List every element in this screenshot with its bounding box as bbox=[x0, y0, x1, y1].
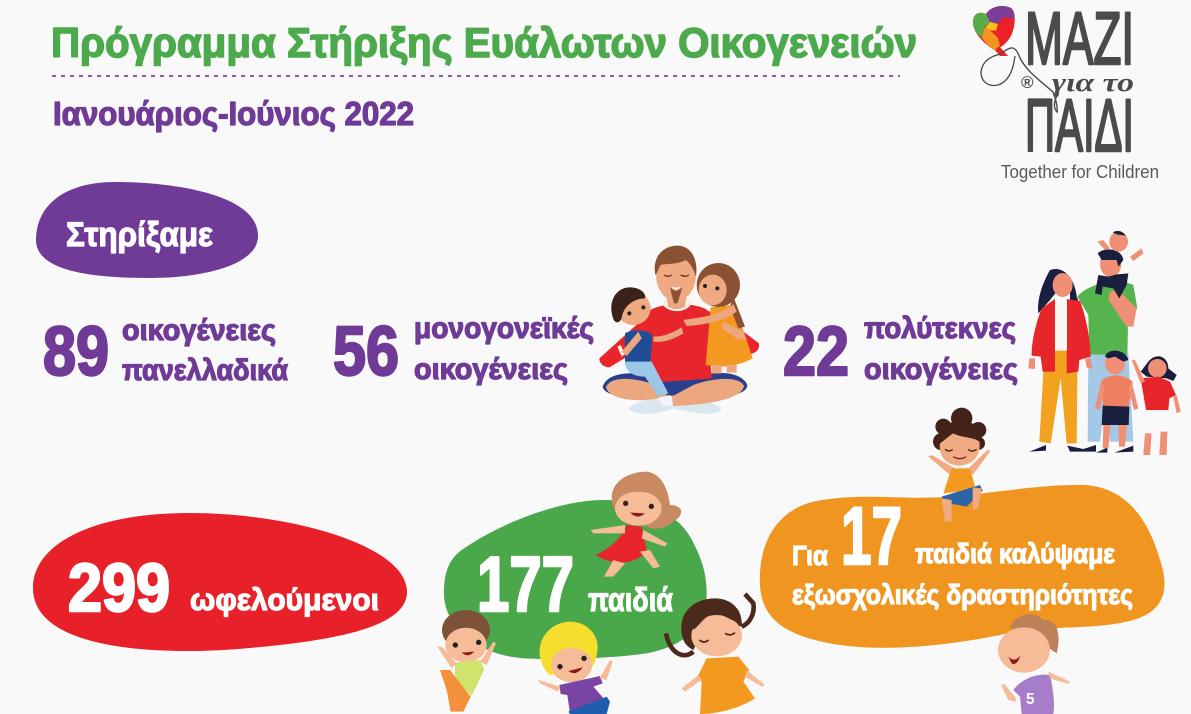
stat: 22 large families bbox=[783, 312, 1018, 390]
stat: 56 single-parent families: οικογένειες bbox=[414, 353, 568, 386]
panel: 17 children extracurricular activities: 17 bbox=[841, 491, 902, 582]
logo: ® bbox=[1021, 73, 1034, 92]
panel: 177 children bbox=[444, 500, 707, 659]
subtitle: period: Ιανουάριος-Ιούνιος 2022 bbox=[53, 95, 414, 132]
heading pill: Στηρίξαμε bbox=[36, 182, 258, 278]
icon: puzzle heart balloon bbox=[973, 6, 1058, 112]
panel: 299 beneficiaries bbox=[33, 513, 407, 651]
stat: 89 families: 89 bbox=[43, 312, 109, 390]
stat: 56 single-parent families: 56 bbox=[333, 312, 399, 390]
illustration: girl in red dress bbox=[591, 472, 681, 577]
panel: 17 children extracurricular activities bbox=[760, 485, 1165, 648]
panel: 17 children extracurricular activities: εξωσχολικές δραστηριότητες bbox=[792, 579, 1133, 610]
logo: για το bbox=[1052, 68, 1134, 97]
illustration: boy in green shirt bbox=[437, 610, 496, 712]
panel: 299 beneficiaries: 299 bbox=[68, 550, 170, 626]
illustration: blond boy in purple shirt bbox=[538, 622, 613, 714]
stat: 22 large families: 22 bbox=[783, 312, 849, 390]
stat: 89 families bbox=[43, 312, 288, 390]
panel: 177 children: παιδιά bbox=[588, 581, 673, 618]
panel: 299 beneficiaries: ωφελούμενοι bbox=[190, 582, 379, 617]
stat: 22 large families: οικογένειες bbox=[864, 353, 1018, 386]
illustration: father with two children bbox=[599, 246, 759, 414]
illustration: curly boy sitting on orange panel bbox=[928, 408, 991, 522]
illustration: running boy number 5 bbox=[998, 614, 1070, 714]
illustration: family with four members and baby bbox=[1028, 231, 1181, 455]
illustration: running boy number 5: 5 bbox=[1026, 691, 1035, 708]
stat: 56 single-parent families: μονογονεϊκές bbox=[414, 312, 594, 345]
panel: 17 children extracurricular activities: Για bbox=[792, 540, 828, 571]
stat: 89 families: πανελλαδικά bbox=[122, 354, 288, 387]
illustration: girl with braids in orange dress bbox=[666, 594, 765, 714]
title: Πρόγραμμα Στήριξης Ευάλωτων Οικογενειών bbox=[51, 19, 917, 66]
panel: 177 children: 177 bbox=[477, 540, 574, 628]
stat: 56 single-parent families bbox=[333, 312, 594, 390]
panel: 17 children extracurricular activities: παιδιά καλύψαμε bbox=[915, 538, 1115, 569]
stat: 22 large families: πολύτεκνες bbox=[864, 312, 1016, 345]
logo: Together for Children bbox=[1001, 162, 1159, 182]
heading pill: Στηρίξαμε: Στηρίξαμε bbox=[66, 216, 213, 254]
illustration: jumping children bbox=[437, 472, 765, 714]
stat: 89 families: οικογένειες bbox=[122, 314, 276, 347]
logo bbox=[973, 0, 1159, 182]
